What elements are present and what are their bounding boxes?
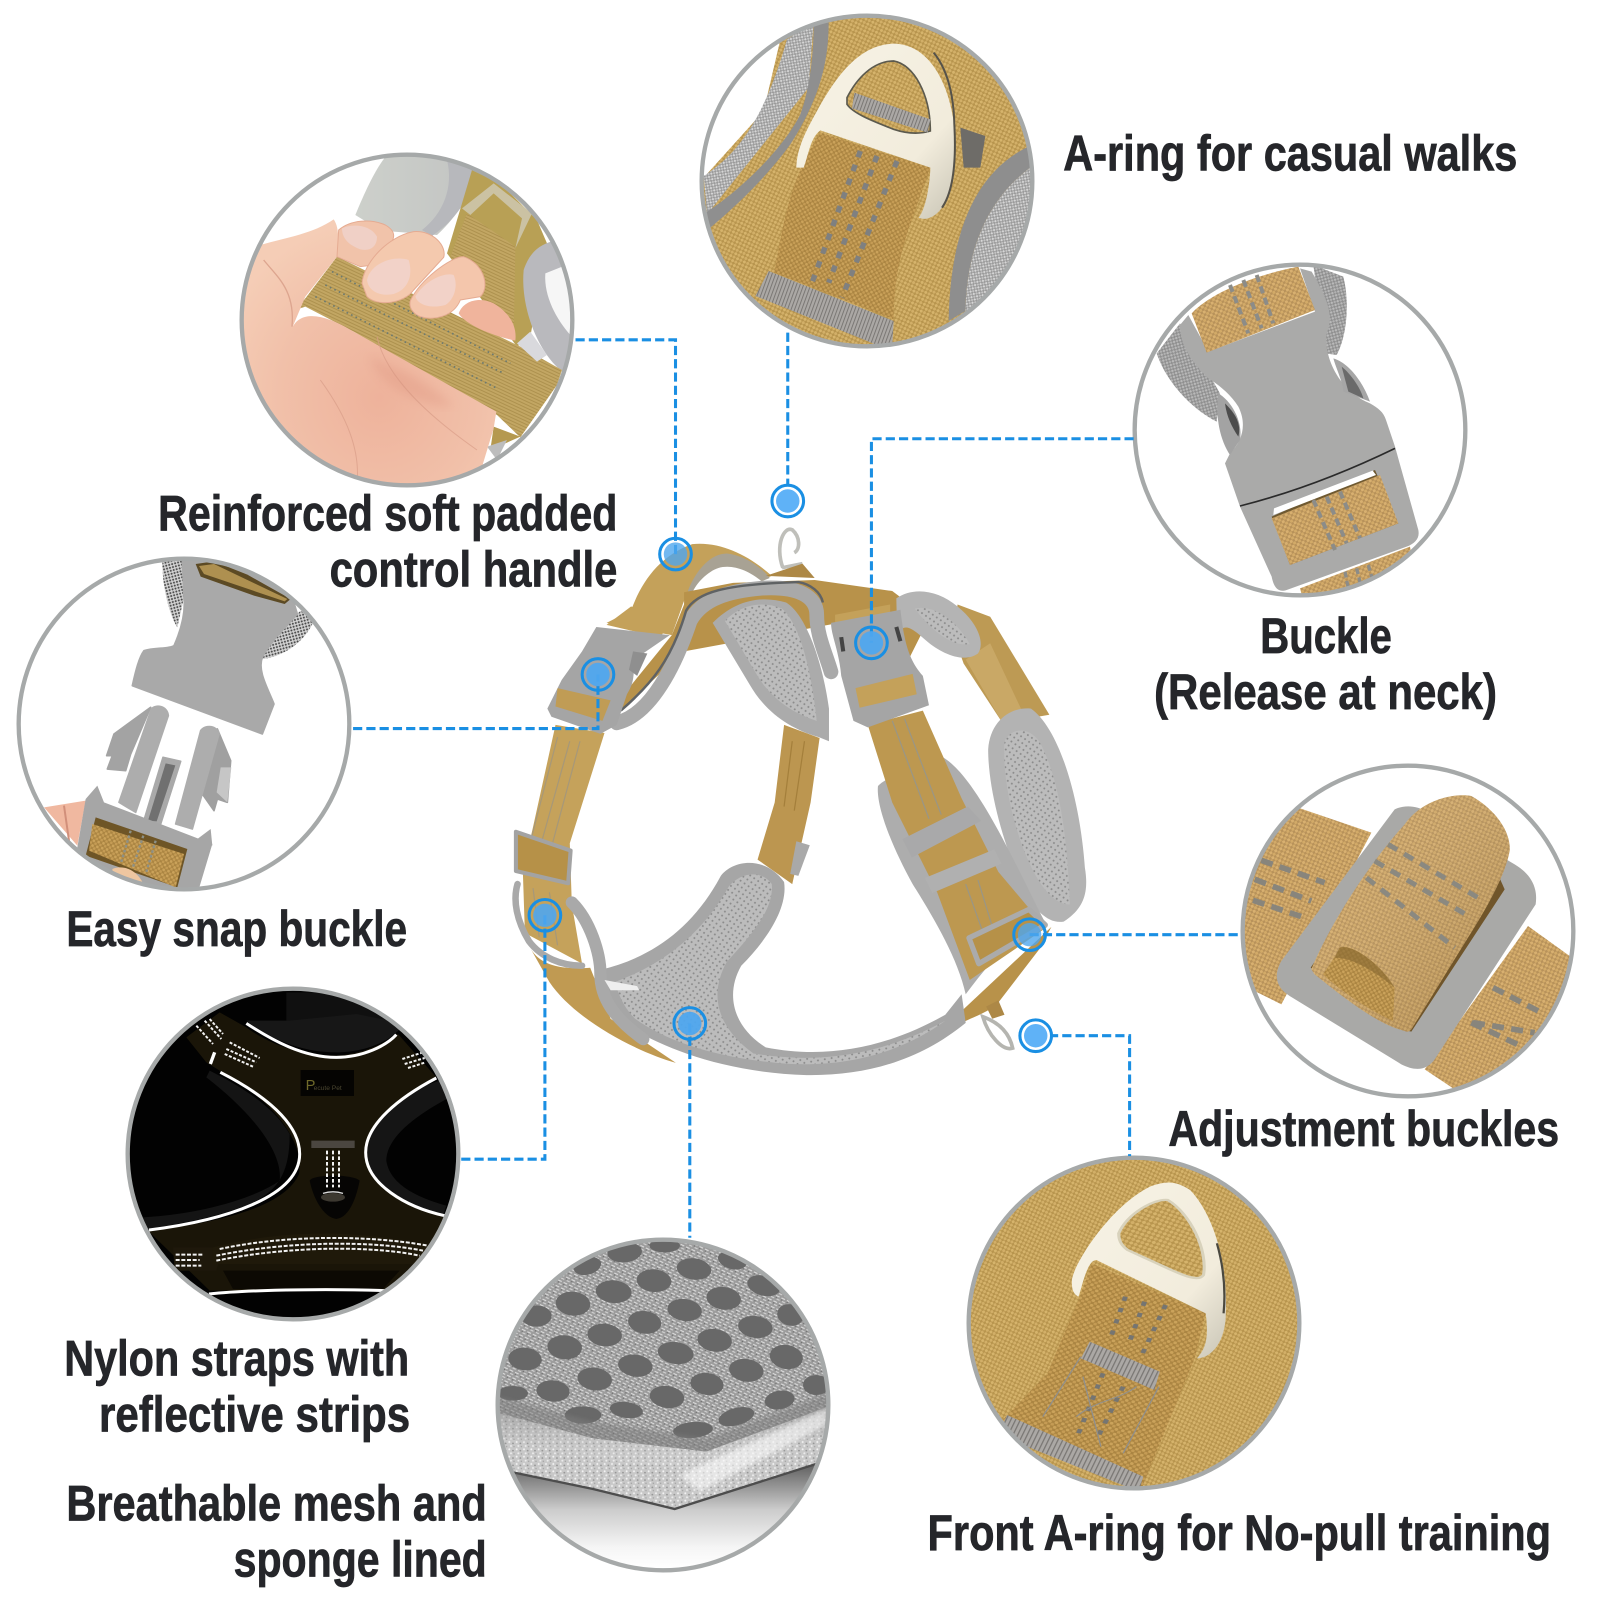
photo circle: reflective nylon straps at night: P [306, 1078, 315, 1094]
label: Breathable mesh and sponge lined [66, 1475, 487, 1588]
dot: reflective [529, 899, 561, 931]
neck pad [896, 591, 981, 658]
front ring [983, 1017, 1013, 1049]
connector: mesh [688, 1023, 691, 1238]
front chest mesh pad [601, 863, 966, 1075]
left slider [516, 832, 571, 883]
photo circle: reflective nylon straps at night: ecute Pet [314, 1085, 342, 1092]
left side buckle [607, 607, 676, 637]
grab handle arc [607, 544, 772, 635]
label: Reinforced soft padded control handle: control handle [330, 542, 617, 598]
gray strap loops [902, 807, 981, 858]
dot: handle [660, 538, 691, 570]
right front strap [868, 711, 1047, 980]
photo circle: neck release buckle [1130, 260, 1470, 600]
connector: control handle [576, 340, 676, 554]
lower body tan band [531, 949, 676, 1063]
photo circle: adjustment buckle slider [1238, 761, 1578, 1101]
label: Easy snap buckle: Easy snap buckle [66, 901, 407, 957]
dot: mesh [674, 1008, 706, 1039]
label: Nylon straps with reflective strips: Nylon straps with [64, 1331, 409, 1387]
label: Breathable mesh and sponge lined: sponge lined [234, 1532, 487, 1588]
connector: buckle [871, 439, 1134, 643]
right oval pad [988, 708, 1086, 922]
center neck buckle [835, 604, 890, 625]
label: A-ring for casual walks: A-ring for casual walks [1063, 125, 1517, 181]
label: Buckle (Release at neck): (Release at neck) [1154, 664, 1497, 720]
dot: A-ring [772, 485, 804, 517]
top shoulder band and ring [684, 580, 929, 668]
tag [604, 980, 639, 990]
label: Buckle (Release at neck) [1154, 608, 1497, 720]
label: Nylon straps with reflective strips [64, 1331, 410, 1443]
center mesh pad [713, 599, 829, 741]
label: Buckle (Release at neck): Buckle [1260, 608, 1392, 664]
middle strap [758, 725, 820, 884]
label: Reinforced soft padded control handle [158, 486, 617, 598]
connector: reflective straps [461, 915, 545, 1159]
connector: front ring [1036, 1036, 1130, 1156]
connector: snap buckle [353, 674, 598, 729]
central harness product illustration [516, 529, 1086, 1075]
front pad left rim [572, 902, 643, 1039]
dot: adjustment [1014, 919, 1045, 951]
label: Reinforced soft padded control handle: Reinforced soft padded [158, 486, 617, 542]
photo circle: reflective nylon straps at night [123, 984, 463, 1324]
right lower tan band [956, 927, 1051, 1027]
left main strap [523, 725, 604, 964]
right slider [969, 909, 1045, 964]
photo circle: front A-ring for no-pull training [964, 1153, 1304, 1493]
photo circle: A-ring for casual walks [697, 11, 1037, 351]
photo circle: breathable mesh and sponge layers [493, 1235, 833, 1575]
photo circle: easy snap buckle separated [14, 554, 354, 894]
front pad outer wrap [516, 884, 582, 966]
label: Breathable mesh and sponge lined: Breathable mesh and [66, 1475, 487, 1531]
connector: A-ring [786, 333, 789, 501]
left collar rim [617, 588, 831, 723]
connector: adjustment buckle [1030, 933, 1239, 936]
dot: buckle [856, 627, 887, 659]
right strap pad [878, 758, 1045, 994]
dot: front ring [1020, 1020, 1052, 1052]
photo circle: reinforced control handle held in hand [237, 150, 577, 493]
label: Nylon straps with reflective strips: reflective strips [99, 1387, 410, 1443]
mid slider [790, 841, 810, 876]
dot: snap buckle [582, 659, 614, 690]
back right strap [953, 604, 1049, 723]
